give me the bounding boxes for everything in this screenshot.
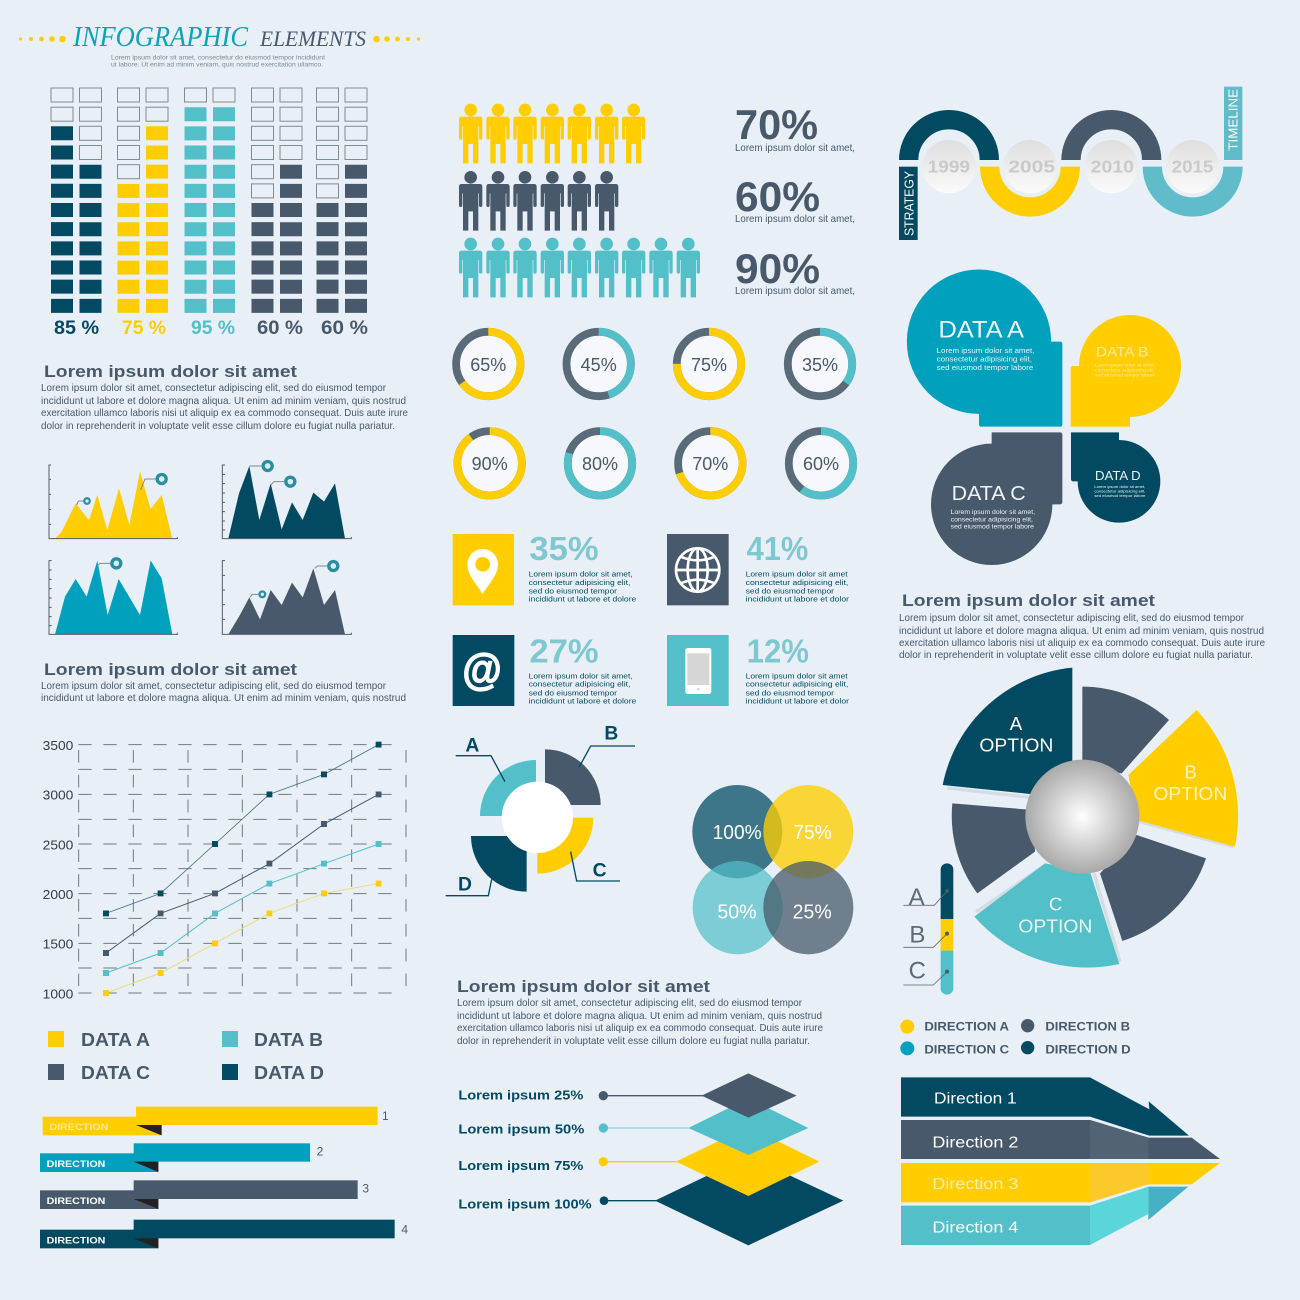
body text: exercitation ullamco laboris nisi ut aliquip ex ea commodo consequat. Duis aute irure	[41, 407, 408, 419]
scale pill: B	[909, 922, 925, 949]
segment b option	[1128, 710, 1238, 847]
card phone 12	[667, 633, 850, 706]
series A	[106, 884, 379, 993]
petal data c: DATA C	[952, 482, 1026, 505]
heading: Lorem ipsum dolor sit amet	[902, 591, 1155, 610]
body text: exercitation ullamco laboris nisi ut aliquip ex ea commodo consequat. Duis aute irure	[457, 1022, 823, 1034]
segment slate lower right	[1100, 835, 1206, 941]
body text: Lorem ipsum dolor sit amet, consectetur adipiscing elit, sed do eiusmod tempor	[899, 612, 1244, 624]
petal data c: consectetur adipisicing elit,	[951, 516, 1033, 523]
petal data d	[1071, 432, 1160, 523]
icon stat cards	[453, 531, 850, 706]
arrow directions	[901, 1077, 1220, 1245]
year 2010	[1085, 140, 1138, 193]
y axis labels: 2000	[43, 888, 73, 902]
body text: exercitation ullamco laboris nisi ut aliquip ex ea commodo consequat. Duis aute irure	[899, 637, 1265, 649]
icon: at sign	[453, 635, 514, 706]
layer 75: Lorem ipsum 75%	[458, 1158, 583, 1173]
layer 50	[458, 1098, 808, 1155]
card at sign 27: consectetur adipisicing elit,	[529, 680, 630, 689]
donut 75	[677, 332, 741, 396]
heading: Lorem ipsum dolor sit amet	[44, 362, 297, 381]
direction 2	[901, 1120, 1220, 1159]
petal data a: consectetur adipisicing elit,	[937, 357, 1032, 364]
arch teal	[1152, 167, 1233, 207]
icon: globe	[667, 534, 729, 605]
year 2005: 2005	[1008, 156, 1055, 176]
donut labels: A	[465, 736, 479, 757]
segment c option	[974, 863, 1119, 968]
body text: dolor in reprehenderit in voluptate velit esse cillum dolore eu fugiat nulla pariatur.	[457, 1035, 810, 1047]
title word: elements: ELEMENTS	[259, 26, 366, 51]
center hole	[502, 782, 573, 853]
direction 3: Direction 3	[932, 1176, 1018, 1193]
legend data b: DATA B	[254, 1030, 323, 1050]
butterfly data petals	[907, 269, 1181, 565]
body text: dolor in reprehenderit in voluptate velit esse cillum dolore eu fugiat nulla pariatur.	[899, 649, 1253, 661]
petal data c: Lorem ipsum dolor sit amet,	[951, 509, 1035, 516]
stat 70: 70%	[735, 101, 818, 148]
body text: Lorem ipsum dolor sit amet, consectetur adipiscing elit, sed do eiusmod tempor	[41, 382, 386, 394]
bar 3: DIRECTION	[47, 1196, 106, 1206]
legend data a	[48, 1030, 150, 1050]
exploded donut with labels	[446, 723, 635, 896]
legend direction a: DIRECTION A	[924, 1020, 1009, 1034]
donut 70: 70%	[692, 454, 728, 474]
card globe 41: sed do eiusmod tempor	[746, 586, 835, 595]
donut 45: 45%	[581, 355, 617, 375]
bar 1: 1	[382, 1109, 389, 1123]
series B	[106, 844, 379, 973]
segment c option: OPTION	[1018, 915, 1092, 936]
donut 60	[789, 431, 853, 496]
empty cells	[51, 88, 367, 198]
donut labels: B	[604, 723, 618, 744]
petal data b	[1071, 315, 1181, 427]
petal data c: sed eiusmod tempor labore	[951, 523, 1035, 530]
card at sign 27: incididunt ut labore et dolore	[529, 697, 636, 706]
bar 1	[43, 1107, 389, 1135]
direction 4: Direction 4	[932, 1219, 1019, 1236]
bar 4: DIRECTION	[47, 1235, 106, 1245]
card location 35: sed do eiusmod tempor	[529, 586, 618, 595]
text block middle left	[41, 660, 406, 704]
text block right	[899, 591, 1265, 661]
legend data d	[222, 1063, 324, 1083]
card phone 12: 12%	[747, 633, 809, 670]
card globe 41: 41%	[747, 531, 808, 568]
card globe 41	[667, 531, 850, 605]
subtitle: Lorem ipsum dolor sit amet, consectetur do eiusmod tempor incididunt	[111, 56, 325, 62]
row slate	[459, 171, 618, 231]
body text	[899, 612, 1265, 661]
year 1999: 1999	[928, 156, 970, 176]
body text	[457, 997, 823, 1047]
direction bars	[40, 1107, 408, 1248]
direction 2: Direction 2	[932, 1134, 1018, 1151]
layer 100: Lorem ipsum 100%	[458, 1196, 592, 1211]
bar 3	[40, 1180, 369, 1209]
line chart legend	[48, 1030, 324, 1083]
subtitle: ut labore. Ut enim ad minim veniam, quis nostrud exercitation ullamco.	[111, 62, 323, 68]
card at sign 27: 27%	[529, 633, 599, 670]
petal data a	[907, 269, 1062, 427]
title word: infographic: INFOGRAPHIC	[72, 22, 248, 53]
bar 4: 4	[401, 1222, 408, 1236]
timeline label: TIMELINE	[1227, 89, 1241, 151]
stat 60: Lorem ipsum dolor sit amet,	[735, 213, 855, 225]
bar percentages: 75 %	[122, 318, 166, 339]
stat 90: 90%	[735, 245, 820, 292]
heading: Lorem ipsum dolor sit amet	[457, 977, 710, 996]
bar 2: 2	[317, 1145, 324, 1159]
year 2015	[1166, 140, 1219, 193]
legend data d: DATA D	[254, 1063, 324, 1083]
petal data d: consectetur adipisicing elit,	[1094, 489, 1145, 493]
body text: Lorem ipsum dolor sit amet, consectetur adipiscing elit, sed do eiusmod tempor	[457, 997, 802, 1009]
layer 50: Lorem ipsum 50%	[458, 1121, 584, 1136]
circle 25	[763, 861, 853, 954]
year 2005	[1003, 140, 1057, 193]
card at sign 27: sed do eiusmod tempor	[529, 688, 618, 697]
y axis labels: 2500	[43, 839, 73, 853]
donut 65	[456, 332, 520, 396]
grid	[78, 745, 397, 993]
icon: location pin	[453, 534, 514, 605]
venn labels: 100%	[713, 821, 762, 844]
petal data b: consectetur adipisicing elit,	[1095, 367, 1155, 372]
venn diagram	[692, 785, 853, 954]
layer 75	[458, 1127, 819, 1196]
venn labels: 25%	[793, 900, 832, 923]
row teal	[459, 238, 700, 297]
area chart: yellow	[49, 465, 177, 539]
donut labels	[458, 723, 618, 896]
year 1999	[922, 140, 976, 193]
segment slate left	[952, 803, 1035, 893]
segment c	[537, 818, 593, 874]
filled cells	[62, 107, 356, 313]
segment a	[480, 760, 536, 816]
layer 25	[458, 1073, 797, 1118]
donut 35: 35%	[802, 355, 838, 375]
card globe 41: consectetur adipisicing elit,	[746, 578, 848, 587]
direction 4	[901, 1187, 1188, 1245]
venn labels: 75%	[793, 821, 832, 844]
donut 90	[458, 431, 522, 496]
donut 90: 90%	[472, 454, 508, 474]
segment c option: C	[1049, 894, 1062, 915]
card globe 41: incididunt ut labore et dolor	[746, 595, 850, 604]
stacked layers	[458, 1073, 843, 1245]
card at sign 27: Lorem ipsum dolor sit amet,	[529, 671, 633, 680]
card location 35: consectetur adipisicing elit,	[529, 578, 630, 587]
legend direction c: DIRECTION C	[924, 1042, 1009, 1056]
donut 70	[678, 431, 742, 496]
leader lines	[446, 746, 635, 896]
icon: at sign: @	[462, 645, 502, 694]
y axis labels: 1500	[43, 938, 73, 952]
body text: Lorem ipsum dolor sit amet, consectetur adipiscing elit, sed do eiusmod tempor	[41, 680, 386, 692]
segment b option: OPTION	[1153, 783, 1227, 804]
strategy label: STRATEGY	[902, 170, 916, 236]
card phone 12: Lorem ipsum dolor sit amet	[746, 671, 848, 680]
strategy label	[899, 167, 918, 240]
venn labels: 50%	[717, 900, 757, 923]
donut 60: 60%	[803, 454, 839, 474]
petal data c	[931, 432, 1062, 565]
block bar chart	[51, 88, 368, 339]
card location 35	[453, 531, 636, 605]
card globe 41: Lorem ipsum dolor sit amet	[746, 569, 848, 578]
scale pill: C	[909, 957, 926, 984]
y axis labels: 1000	[43, 987, 73, 1001]
direction 1	[901, 1077, 1189, 1136]
people percentages	[735, 101, 855, 297]
card location 35: Lorem ipsum dolor sit amet,	[529, 569, 633, 578]
petal data d: Lorem ipsum dolor sit amet,	[1094, 485, 1145, 489]
direction 1: Direction 1	[934, 1090, 1017, 1107]
text block top left	[41, 362, 408, 432]
venn labels	[713, 821, 832, 923]
bar 3: 3	[362, 1181, 369, 1195]
card at sign 27	[453, 633, 636, 706]
donut labels: D	[458, 875, 472, 896]
area chart: slate	[222, 560, 351, 634]
center sphere	[1025, 760, 1139, 874]
arch yellow	[990, 167, 1070, 207]
circle 50	[693, 861, 783, 954]
donut 75: 75%	[691, 355, 727, 375]
donut 80	[568, 431, 632, 496]
title decorative dots left	[19, 36, 66, 42]
legend direction c	[900, 1041, 1009, 1056]
bar percentages: 85 %	[54, 318, 99, 339]
segment a option: A	[1010, 713, 1023, 734]
series C	[106, 794, 379, 953]
segment shadows	[947, 788, 1233, 962]
layer 100	[458, 1156, 843, 1245]
title decorative dots right	[373, 36, 420, 42]
petal data d: DATA D	[1095, 469, 1141, 483]
circle 75	[763, 785, 853, 878]
bar percentages: 60 %	[321, 318, 368, 339]
arch slate	[1071, 120, 1152, 160]
petal data d: sed eiusmod tempor labore	[1094, 494, 1145, 498]
legend direction b	[1021, 1019, 1130, 1034]
donut 35	[788, 332, 852, 396]
bar percentages: 60 %	[257, 318, 303, 339]
body text	[41, 680, 406, 704]
legend data b	[222, 1030, 323, 1050]
card phone 12: incididunt ut labore et dolor	[746, 697, 850, 706]
direction legend	[900, 1019, 1131, 1056]
stat 60	[735, 173, 855, 225]
stat 70	[735, 101, 855, 154]
body text: dolor in reprehenderit in voluptate velit esse cillum dolore eu fugiat nulla pariatur.	[41, 420, 395, 432]
petal data a: Lorem ipsum dolor sit amet,	[937, 348, 1034, 355]
stat 70: Lorem ipsum dolor sit amet,	[735, 142, 855, 154]
card location 35: incididunt ut labore et dolore	[529, 595, 636, 604]
timeline	[899, 87, 1242, 240]
body text	[41, 382, 408, 432]
area chart: dark teal	[222, 460, 351, 539]
line chart	[43, 739, 406, 1001]
area charts	[49, 460, 351, 634]
row yellow	[459, 104, 645, 163]
stat 90: Lorem ipsum dolor sit amet,	[735, 285, 855, 297]
text block center	[457, 977, 823, 1047]
donut labels: C	[593, 861, 607, 882]
card phone 12: consectetur adipisicing elit,	[746, 680, 848, 689]
y axis labels	[43, 739, 73, 1001]
direction 3	[901, 1163, 1220, 1202]
segment d	[471, 836, 527, 892]
title	[19, 22, 420, 68]
y axis labels: 3000	[43, 789, 73, 803]
legend direction b: DIRECTION B	[1045, 1020, 1130, 1034]
year 2010: 2010	[1091, 156, 1134, 176]
bar 2: DIRECTION	[47, 1159, 106, 1169]
timeline label	[1224, 87, 1242, 160]
y axis labels: 3500	[43, 739, 73, 753]
petal data b: Lorem ipsum dolor sit amet,	[1095, 362, 1155, 367]
donut charts	[456, 332, 853, 496]
icon: smartphone	[667, 635, 729, 706]
bar 1: DIRECTION	[49, 1122, 109, 1132]
segment a option: OPTION	[979, 735, 1053, 756]
scale pill	[903, 863, 953, 995]
bar 4	[40, 1220, 408, 1248]
arch dark	[909, 120, 989, 160]
segment a option	[943, 668, 1072, 794]
card location 35: 35%	[529, 531, 599, 568]
legend direction d	[1021, 1041, 1131, 1056]
bar percentages: 95 %	[191, 318, 235, 339]
legend data a: DATA A	[81, 1030, 150, 1050]
stat 90	[735, 245, 855, 297]
petal data b: sed eiusmod tempor labore	[1095, 372, 1156, 377]
card phone 12: sed do eiusmod tempor	[746, 688, 835, 697]
legend data c	[48, 1063, 150, 1083]
scale pill: A	[909, 884, 925, 911]
circle 100	[692, 785, 782, 878]
petal data a: DATA A	[938, 316, 1024, 343]
donut 80: 80%	[582, 454, 618, 474]
segment b	[545, 749, 601, 805]
body text: incididunt ut labore et dolore magna aliqua. Ut enim ad minim veniam, quis nostrud	[41, 395, 406, 407]
petal data b: DATA B	[1096, 344, 1148, 360]
subtitle	[111, 56, 325, 68]
legend direction d: DIRECTION D	[1045, 1042, 1131, 1056]
body text: incididunt ut labore et dolore magna aliqua. Ut enim ad minim veniam, quis nostrud	[899, 625, 1264, 637]
legend data c: DATA C	[81, 1063, 150, 1083]
body text: incididunt ut labore et dolore magna aliqua. Ut enim ad minim veniam, quis nostrud	[457, 1010, 822, 1022]
petal data a: sed eiusmod tempor labore	[937, 365, 1033, 372]
people pictogram	[459, 104, 700, 297]
bar 2	[40, 1143, 324, 1172]
body text: incididunt ut labore et dolore magna aliqua. Ut enim ad minim veniam, quis nostrud	[41, 692, 406, 704]
heading: Lorem ipsum dolor sit amet	[44, 660, 297, 679]
year 2015: 2015	[1172, 156, 1214, 176]
option pie chart	[900, 668, 1238, 1056]
layer 25: Lorem ipsum 25%	[458, 1087, 583, 1102]
bar percentages	[54, 318, 368, 339]
series D	[106, 745, 379, 913]
segment slate top	[1082, 687, 1169, 773]
donut 45	[566, 332, 631, 396]
stat 60: 60%	[735, 173, 820, 220]
donut 65: 65%	[470, 355, 506, 375]
area chart: blue	[49, 557, 177, 634]
segment b option: B	[1184, 761, 1197, 782]
